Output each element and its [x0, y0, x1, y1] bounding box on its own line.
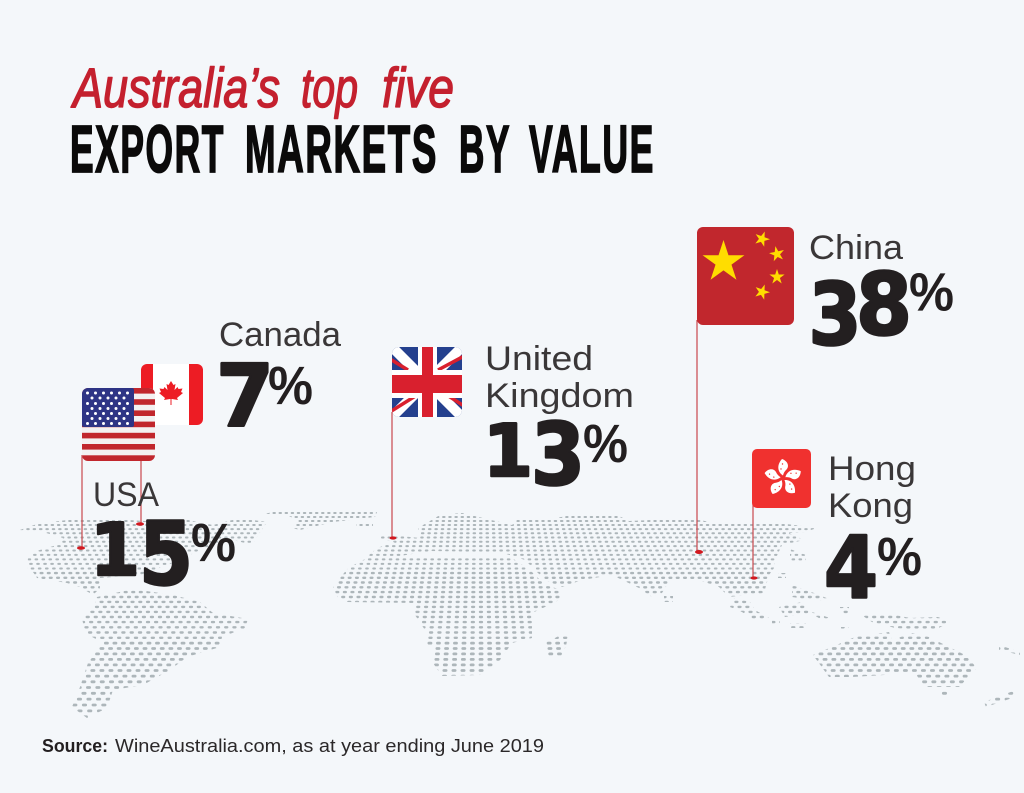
market: USA	[77, 388, 236, 606]
market: China	[695, 227, 954, 554]
value: 13%: 3	[531, 406, 585, 506]
pole: UK	[390, 412, 396, 540]
title: headline: VALUE	[529, 112, 655, 187]
title	[70, 56, 655, 187]
value: 13%: %	[583, 414, 628, 474]
pole: China	[695, 320, 703, 554]
value: 15%	[90, 504, 236, 606]
title: script line: Australia’s	[71, 56, 280, 119]
value: 38%	[808, 256, 954, 366]
title: headline: BY	[459, 112, 511, 187]
value: 4%	[824, 519, 922, 619]
icon: UK flag	[390, 347, 464, 417]
dotted world map	[0, 513, 1024, 717]
icon: Hong Kong flag	[752, 449, 811, 508]
label: China: China	[809, 229, 903, 267]
market: Canada	[136, 316, 341, 526]
value: 15%: 1	[90, 508, 140, 592]
title: headline: EXPORT	[70, 112, 225, 187]
label: United Kingdom	[485, 340, 634, 415]
title: script line: five	[382, 56, 454, 119]
value: 13%	[483, 406, 628, 506]
value: 15%: 5	[139, 504, 193, 606]
label: United Kingdom: United	[485, 340, 593, 378]
market: United Kingdom	[390, 340, 634, 540]
value: 15%: %	[191, 513, 236, 573]
label: Hong Kong	[828, 450, 916, 525]
market: Hong Kong	[750, 449, 922, 619]
value: 38%: 3	[808, 266, 862, 366]
pole: Canada	[136, 420, 144, 526]
value: 4%: %	[877, 527, 922, 587]
icon: USA flag	[82, 388, 155, 461]
icon: Canada flag	[141, 364, 203, 425]
title: headline: MARKETS	[245, 112, 438, 187]
source note: Source:	[42, 736, 108, 756]
pole: Hong Kong	[750, 503, 758, 580]
title: headline	[70, 112, 655, 187]
value: 7%: %	[268, 356, 313, 416]
value: 13%: 1	[483, 409, 533, 493]
label: United Kingdom: Kingdom	[485, 377, 634, 415]
value: 38%: 8	[856, 256, 912, 356]
title: script line: top	[301, 56, 358, 119]
label: Canada: Canada	[219, 316, 341, 354]
title: script line	[71, 56, 454, 119]
label: USA: USA	[93, 476, 159, 514]
value: 38%: %	[909, 262, 954, 322]
value: 4%: 4	[824, 519, 878, 619]
label: Hong Kong: Kong	[828, 487, 913, 525]
icon: China flag	[697, 227, 794, 325]
value: 7%: 7	[216, 346, 274, 446]
source note: WineAustralia.com, as at year ending June 2019	[115, 736, 544, 756]
pole: USA	[77, 455, 85, 550]
label: Hong Kong: Hong	[828, 450, 916, 488]
value: 7%	[216, 346, 313, 446]
